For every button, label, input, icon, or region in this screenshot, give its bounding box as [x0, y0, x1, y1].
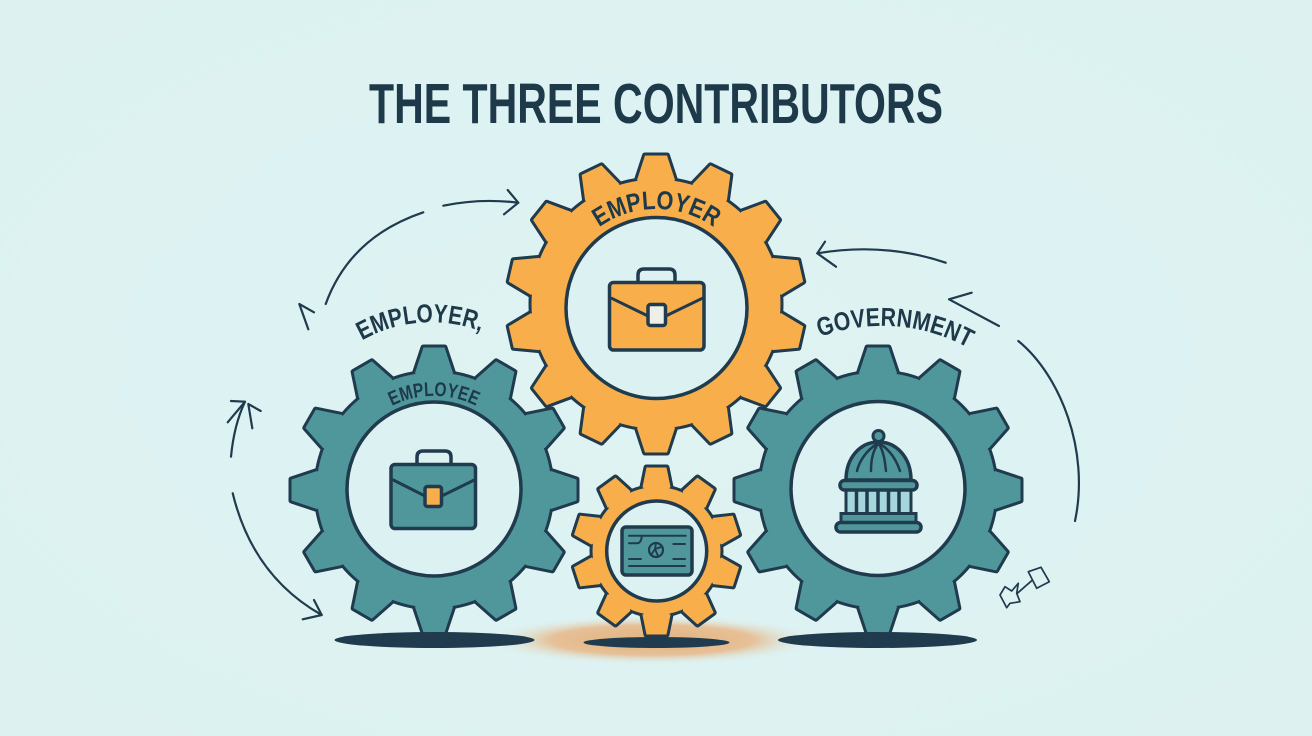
gear hole	[347, 402, 521, 576]
icon: small connector sketch	[1000, 567, 1049, 608]
gear hole	[566, 218, 747, 398]
gear body	[573, 468, 740, 634]
gear: government (right, teal)	[736, 348, 1020, 632]
arrow: into top gear	[443, 190, 518, 214]
icon: banknote card	[622, 527, 692, 575]
arrow: right long arc	[1018, 341, 1079, 521]
label: government: GOVERNMENT	[817, 308, 976, 346]
gear hole	[607, 501, 707, 601]
gear: employee (left, teal)	[288, 344, 580, 632]
ground shadow: left gear	[334, 632, 534, 648]
arrow: upper-left arc	[299, 212, 423, 329]
gear body	[736, 348, 1020, 632]
icon: capitol building	[836, 430, 921, 532]
gear: employer (top, orange)	[506, 152, 806, 456]
label: employee on gear: EMPLOYEE	[387, 382, 481, 406]
gear: money (small, orange)	[573, 468, 740, 634]
arrow: lower-left arc	[233, 493, 322, 619]
gear body	[292, 348, 576, 632]
ground glow under small gear	[484, 615, 820, 665]
arrow: right short segment	[949, 293, 999, 326]
label: employer on gear: EMPLOYER	[591, 191, 720, 227]
gear hole	[791, 402, 965, 576]
label: employer,: EMPLOYER,	[355, 304, 481, 340]
ground shadow: right gear	[778, 632, 977, 648]
ground shadow: small gear	[584, 637, 730, 648]
icon: orange briefcase	[610, 269, 704, 350]
icon: teal briefcase	[391, 451, 476, 528]
arrow: upper-right into top gear	[817, 242, 946, 267]
arrow: left upward with double head	[228, 401, 261, 457]
title: THE THREE CONTRIBUTORS	[369, 72, 943, 136]
gear body	[507, 156, 805, 452]
